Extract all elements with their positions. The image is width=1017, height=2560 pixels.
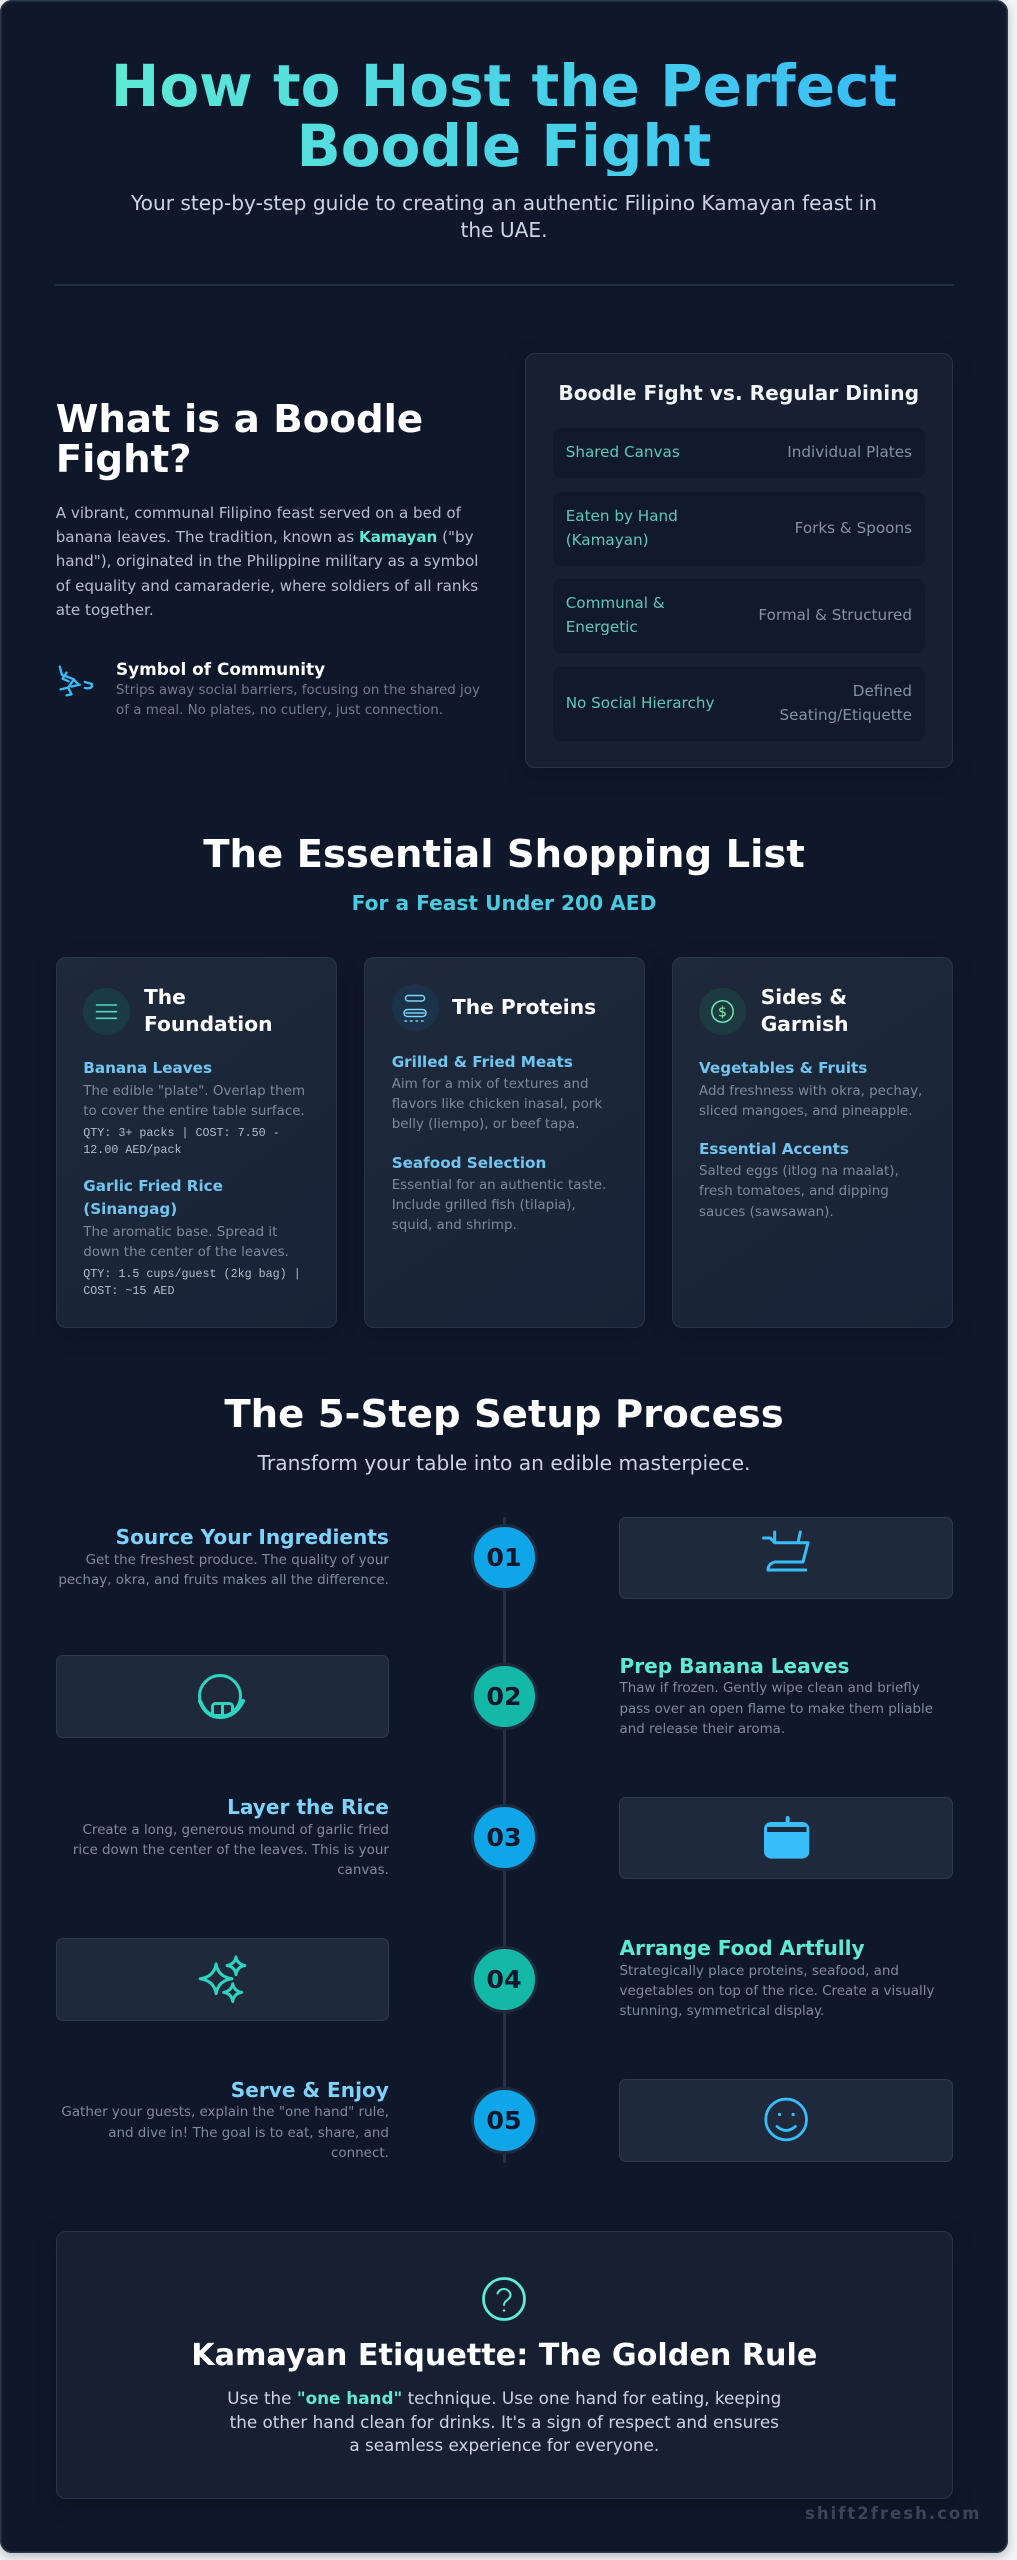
- icon: calendar: [764, 1816, 810, 1859]
- etiquette text: the other hand clean for drinks. It's a sign of respect and ensures: [230, 2412, 779, 2432]
- item title: seafood: Seafood Selection: [392, 1154, 546, 1172]
- heading: what is a boodle fight: What is a Boodle: [56, 397, 423, 442]
- symbol of community text: [116, 659, 480, 718]
- row: communal: Energetic: [566, 618, 638, 636]
- card heading: The Proteins: [452, 995, 596, 1019]
- item title: garlic rice: [83, 1177, 223, 1218]
- title: [104, 56, 904, 176]
- step 5 number: [470, 2086, 538, 2154]
- subtitle: Your step-by-step guide to creating an authentic Filipino Kamayan feast in: [131, 190, 877, 214]
- text block: boodle fight description: [56, 504, 478, 619]
- row: communal: Formal & Structured: [758, 606, 912, 624]
- step 3 number: [470, 1804, 538, 1871]
- icon: dollar circle: [699, 988, 746, 1035]
- icon: menu lines: [83, 988, 130, 1035]
- icon: question mark: [482, 2277, 526, 2321]
- step 3 text: [73, 1795, 389, 1878]
- item text: garlic rice: [83, 1225, 289, 1260]
- card heading: Garnish: [761, 1012, 849, 1036]
- step 4 icon box: [56, 1938, 389, 2020]
- step 5 text: Serve & Enjoy: [231, 2078, 389, 2102]
- etiquette text: [227, 2388, 781, 2455]
- panel: the proteins: [364, 957, 645, 1328]
- etiquette heading: Kamayan Etiquette: The Golden Rule: [191, 2338, 817, 2373]
- symbol description: [116, 683, 480, 718]
- item text: banana leaves: The edible "plate". Overlap them: [83, 1084, 305, 1099]
- heading: shopping list: The Essential Shopping List: [203, 832, 805, 877]
- symbol description: of a meal. No plates, no cutlery, just connection.: [116, 703, 443, 718]
- icon: smile: [764, 2098, 808, 2142]
- subheading: setup process: Transform your table into an edible masterpiece.: [258, 1451, 750, 1475]
- step 1 text: [58, 1525, 389, 1588]
- step 4 text: stunning, symmetrical display.: [620, 2004, 824, 2019]
- item text: meats: [392, 1077, 602, 1132]
- step 2 text: pass over an open flame to make them pliable: [620, 1702, 933, 1716]
- icon: leaf bowl: [198, 1674, 246, 1719]
- item text: meats: belly (liempo), or beef tapa.: [392, 1117, 579, 1132]
- step 2 text: Prep Banana Leaves: [620, 1654, 849, 1678]
- step 4 text: Strategically place proteins, seafood, and: [620, 1964, 899, 1978]
- symbol description: Strips away social barriers, focusing on the shared joy: [116, 683, 480, 698]
- row: hierarchy: Seating/Etiquette: [780, 706, 912, 724]
- subtitle: [131, 190, 877, 242]
- card heading: [761, 984, 849, 1036]
- title: How to Host the Perfect: [111, 52, 897, 120]
- step 4 text: Arrange Food Artfully: [620, 1936, 865, 1960]
- item title: banana leaves: Banana Leaves: [83, 1059, 212, 1077]
- step 2 number: [470, 1663, 538, 1730]
- panel: etiquette callout: [56, 2231, 953, 2499]
- item text: meats: Aim for a mix of textures and: [392, 1077, 589, 1092]
- text block: boodle fight description: ate together.: [56, 601, 154, 619]
- heading: what is a boodle fight: Fight?: [56, 437, 192, 482]
- step 3 icon box: [619, 1797, 953, 1879]
- symbol heading: Symbol of Community: [116, 659, 325, 679]
- step 5 icon box: [619, 2079, 953, 2162]
- heading: setup process: The 5-Step Setup Process: [224, 1392, 784, 1437]
- item text: garlic rice: down the center of the leaves.: [83, 1245, 289, 1260]
- row: eaten by hand: [553, 492, 925, 566]
- item title: vegetables: Vegetables & Fruits: [699, 1059, 867, 1077]
- step 1 text: Source Your Ingredients: [116, 1525, 389, 1549]
- item text: vegetables: [699, 1084, 922, 1119]
- step 3 text: Layer the Rice: [227, 1795, 389, 1819]
- text block: boodle fight description: of equality and camaraderie, where soldiers of all ranks: [56, 577, 478, 595]
- item title: accents: Essential Accents: [699, 1140, 849, 1158]
- item text: accents: sauces (sawsawan).: [699, 1205, 834, 1220]
- step 1 icon box: [619, 1517, 953, 1599]
- item text: accents: fresh tomatoes, and dipping: [699, 1184, 889, 1199]
- card heading: Foundation: [144, 1012, 272, 1036]
- row: communal: Communal &: [566, 594, 665, 612]
- icon: dollar circle: $: [718, 1005, 727, 1021]
- watermark: shift2fresh.com: [805, 2504, 981, 2523]
- step 2 number: 02: [486, 1682, 522, 1711]
- header divider line: [55, 284, 954, 286]
- quantity: banana leaves: QTY: 3+ packs | COST: 7.50 -: [83, 1126, 280, 1140]
- step 5 number: 05: [486, 2106, 522, 2134]
- step 3 text: canvas.: [337, 1863, 389, 1878]
- step 1 number: 01: [486, 1543, 522, 1572]
- step 4 number: 04: [486, 1964, 522, 1994]
- step 5 text: connect.: [331, 2146, 389, 2161]
- step 2 icon box: [56, 1655, 389, 1738]
- quantity: garlic rice: COST: ~15 AED: [83, 1284, 174, 1298]
- panel: the foundation: [56, 957, 337, 1328]
- row: hierarchy: No Social Hierarchy: [566, 694, 714, 712]
- step 1 number: [470, 1524, 538, 1591]
- item text: accents: [699, 1164, 899, 1220]
- item text: seafood: squid, and shrimp.: [392, 1218, 517, 1233]
- step 3 text: Create a long, generous mound of garlic fried: [83, 1822, 389, 1838]
- quantity: banana leaves: 12.00 AED/pack: [83, 1142, 181, 1156]
- step 4 text: vegetables on top of the rice. Create a visually: [620, 1984, 934, 1999]
- step 1 text: pechay, okra, and fruits makes all the difference.: [58, 1573, 389, 1588]
- card heading: Sides &: [761, 984, 847, 1008]
- icon: burger: [392, 984, 439, 1031]
- item text: seafood: Essential for an authentic taste.: [392, 1178, 606, 1193]
- card heading: The: [144, 984, 186, 1008]
- row: shared canvas: Shared Canvas: [566, 443, 680, 461]
- row: hierarchy: [553, 667, 925, 741]
- step 2 text: and release their aroma.: [620, 1722, 785, 1737]
- step 2 text: Thaw if frozen. Gently wipe clean and briefly: [620, 1681, 920, 1696]
- quantity: banana leaves: [83, 1126, 280, 1156]
- item text: vegetables: Add freshness with okra, pechay,: [699, 1084, 922, 1099]
- quantity: garlic rice: QTY: 1.5 cups/guest (2kg bag) |: [83, 1267, 301, 1281]
- item text: meats: flavors like chicken inasal, pork: [392, 1097, 602, 1112]
- step 3 text: rice down the center of the leaves. This is your: [73, 1843, 389, 1858]
- row: shared canvas: Individual Plates: [787, 443, 912, 461]
- item text: seafood: [392, 1178, 606, 1233]
- text block: boodle fight description: banana leaves. The tradition, known as Kamayan ("by: [56, 528, 474, 546]
- subtitle: the UAE.: [460, 218, 548, 242]
- title: Boodle Fight: [297, 112, 711, 180]
- row: communal: [553, 579, 925, 653]
- text block: boodle fight description: hand"), originated in the Philippine military as a symbol: [56, 552, 478, 570]
- item text: garlic rice: The aromatic base. Spread it: [83, 1225, 277, 1240]
- card heading: [144, 984, 272, 1036]
- step 5 text: Gather your guests, explain the "one hand" rule,: [61, 2105, 389, 2120]
- text block: boodle fight description: A vibrant, communal Filipino feast served on a bed of: [56, 504, 461, 522]
- step 5 text: and dive in! The goal is to eat, share, and: [108, 2126, 389, 2140]
- item text: banana leaves: to cover the entire table surface.: [83, 1104, 305, 1119]
- step 2 text: [619, 1654, 933, 1737]
- heading: what is a boodle fight: [56, 397, 423, 482]
- step 4 text: [620, 1936, 934, 2019]
- row: eaten by hand: Eaten by Hand: [566, 507, 678, 525]
- icon: shopping cart: [762, 1530, 810, 1572]
- item text: banana leaves: [83, 1084, 305, 1119]
- item title: garlic rice: Garlic Fried Rice: [83, 1177, 223, 1195]
- item title: garlic rice: (Sinangag): [83, 1200, 177, 1218]
- row: eaten by hand: Forks & Spoons: [795, 519, 912, 537]
- row: eaten by hand: (Kamayan): [566, 531, 649, 549]
- icon: symbol of community: [58, 666, 94, 696]
- step 4 number: [470, 1946, 538, 2012]
- panel: comparison table: [525, 353, 953, 768]
- row: hierarchy: Defined: [853, 682, 912, 700]
- step 1 text: Get the freshest produce. The quality of your: [86, 1552, 389, 1568]
- etiquette text: Use the "one hand" technique. Use one hand for eating, keeping: [227, 2388, 781, 2408]
- step 3 number: 03: [486, 1823, 522, 1852]
- subheading: budget: For a Feast Under 200 AED: [352, 890, 656, 914]
- timeline line: [502, 1517, 506, 2163]
- panel: sides and garnish: [672, 957, 953, 1328]
- item text: vegetables: sliced mangoes, and pineapple.: [699, 1104, 912, 1119]
- item text: seafood: Include grilled fish (tilapia),: [392, 1198, 576, 1213]
- item text: accents: Salted eggs (itlog na maalat),: [699, 1164, 899, 1179]
- etiquette text: a seamless experience for everyone.: [349, 2435, 659, 2455]
- item title: meats: Grilled & Fried Meats: [392, 1052, 573, 1070]
- quantity: garlic rice: [83, 1267, 301, 1298]
- comparison heading: Boodle Fight vs. Regular Dining: [558, 381, 919, 405]
- row: shared canvas: [553, 428, 925, 478]
- icon: sparkles: [198, 1955, 246, 2004]
- step 5 text: [61, 2078, 389, 2161]
